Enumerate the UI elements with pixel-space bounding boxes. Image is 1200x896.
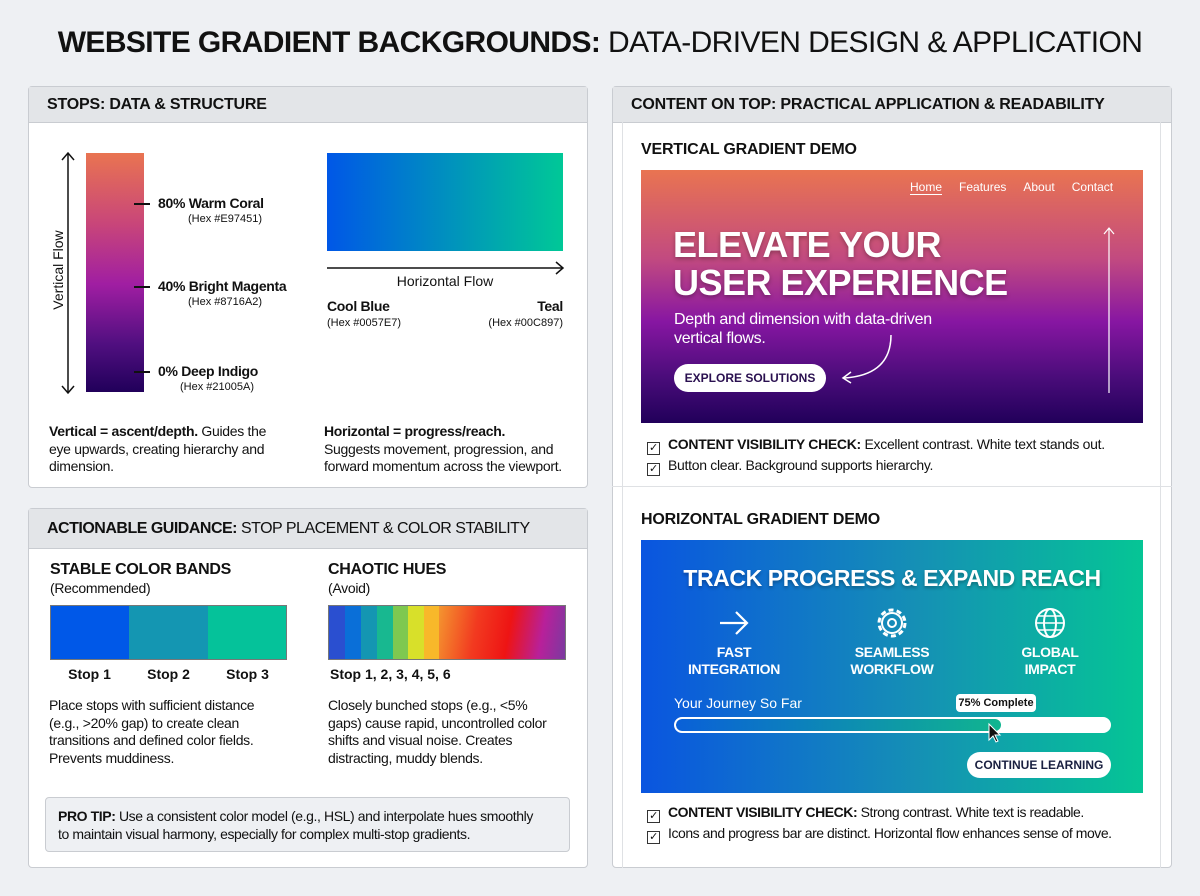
header: content on top [613, 87, 1171, 123]
headline: ELEVATE YOUR [673, 224, 941, 265]
text: chaotic: Closely bunched stops (e.g., <5% [328, 697, 527, 713]
curved arrow [842, 335, 892, 384]
stable bands swatch [50, 605, 287, 660]
title: WEBSITE GRADIENT BACKGROUNDS: DATA-DRIVEN DESIGN & APPLICATION [58, 26, 1142, 59]
label: vertical flow: Vertical Flow [50, 230, 66, 310]
heading: horizontal demo: HORIZONTAL GRADIENT DEMO [641, 511, 880, 528]
nav: About [1023, 180, 1055, 194]
text: chaotic [328, 697, 547, 766]
check: vertical: Button clear. Background supports hierarchy. [668, 457, 933, 473]
heading: vertical demo: VERTICAL GRADIENT DEMO [641, 141, 857, 158]
stop labels vertical: (Hex #8716A2) [188, 296, 262, 308]
feature: fast integration [688, 611, 780, 677]
vertical demo [641, 170, 1143, 423]
progress tooltip [956, 694, 1036, 712]
panel: content on top [612, 86, 1172, 868]
features [688, 608, 1079, 677]
text: horizontal explanation: forward momentum across the viewport. [324, 458, 562, 474]
cursor [988, 722, 1002, 743]
header: guidance: ACTIONABLE GUIDANCE: STOP PLACEMENT & COLOR STABILITY [47, 520, 530, 537]
stop labels vertical [134, 195, 287, 393]
heading: stable color bands [50, 561, 231, 596]
stop labels chaotic: Stop 1, 2, 3, 4, 5, 6 [330, 666, 451, 682]
feature: fast integration: FAST [717, 644, 751, 660]
stop labels vertical: 80% Warm Coral [158, 195, 264, 211]
subtext: Depth and dimension with data-driven [674, 311, 932, 328]
heading: stable color bands: STABLE COLOR BANDS [50, 561, 231, 578]
nav [910, 180, 1113, 195]
check: vertical: CONTENT VISIBILITY CHECK: Excellent contrast. White text stands out. [668, 436, 1105, 452]
feature: fast integration: INTEGRATION [688, 661, 780, 677]
pro tip box: PRO TIP: Use a consistent color model (e.g., HSL) and interpolate hues smoothly [58, 808, 533, 824]
text: horizontal explanation [324, 423, 562, 474]
button: continue learning: CONTINUE LEARNING [975, 758, 1103, 772]
progress tooltip: 75% Complete [958, 697, 1034, 709]
text: chaotic: distracting, muddy blends. [328, 750, 483, 766]
check: horizontal: ✓ [649, 810, 658, 822]
headline: TRACK PROGRESS & EXPAND REACH [683, 565, 1101, 591]
endpoints labels: (Hex #0057E7) [327, 317, 401, 329]
label: horizontal flow: Horizontal Flow [397, 273, 493, 289]
feature: seamless workflow [850, 608, 934, 677]
text: horizontal explanation: Suggests movement, progression, and [324, 440, 553, 456]
text: horizontal explanation: Horizontal = progress/reach. [324, 423, 505, 439]
stop labels vertical: (Hex #E97451) [188, 213, 262, 225]
button [674, 364, 826, 392]
check: horizontal: Icons and progress bar are distinct. Horizontal flow enhances sense of move. [668, 825, 1112, 841]
text: vertical explanation: dimension. [49, 458, 114, 474]
feature: global impact [1021, 608, 1079, 677]
text: vertical explanation: Vertical = ascent/depth. Guides the [49, 423, 266, 439]
text: stable: Prevents muddiness. [49, 750, 174, 766]
heading: chaotic hues [328, 561, 446, 596]
check: horizontal: ✓ [649, 831, 658, 843]
nav: Contact [1072, 180, 1113, 194]
feature: seamless workflow: SEAMLESS [855, 644, 929, 660]
check: horizontal: CONTENT VISIBILITY CHECK: Strong contrast. White text is readable. [668, 804, 1084, 820]
stop labels vertical: 40% Bright Magenta [158, 278, 286, 294]
text: chaotic: gaps) cause rapid, uncontrolled color [328, 714, 546, 730]
endpoints labels: Teal [537, 298, 563, 314]
text: stable: (e.g., >20% gap) to create clean [49, 714, 239, 730]
text: stable: Place stops with sufficient distance [49, 697, 254, 713]
text: stable: transitions and defined color fields. [49, 732, 253, 748]
endpoints labels: (Hex #00C897) [488, 317, 563, 329]
feature: seamless workflow: WORKFLOW [850, 661, 934, 677]
endpoints labels: Cool Blue [327, 298, 390, 314]
check: vertical: ✓ [649, 442, 658, 454]
vertical gradient bar [86, 153, 144, 392]
chaotic swatch [328, 605, 566, 660]
progress bar [674, 717, 1111, 733]
headline [673, 224, 1008, 303]
header: stops: STOPS: DATA & STRUCTURE [47, 96, 267, 113]
horizontal demo [641, 540, 1143, 793]
stop labels: Stop 1 [68, 666, 111, 682]
pro tip box: to maintain visual harmony, especially for complex multi-stop gradients. [58, 826, 470, 842]
feature: global impact: GLOBAL [1021, 644, 1079, 660]
check: vertical: ✓ [649, 463, 658, 475]
stop labels [68, 666, 269, 682]
header: guidance [29, 509, 587, 549]
stop labels: Stop 2 [147, 666, 190, 682]
horizontal gradient rect [327, 153, 563, 251]
text: vertical explanation: eye upwards, creating hierarchy and [49, 440, 264, 456]
guide lines [622, 122, 623, 868]
stop labels vertical: 0% Deep Indigo [158, 363, 258, 379]
nav: Features [959, 180, 1006, 194]
pro tip box [45, 797, 570, 852]
panel: actionable guidance [28, 508, 588, 868]
text: stable [49, 697, 254, 766]
heading: stable color bands: (Recommended) [50, 580, 150, 596]
up arrow [1104, 227, 1114, 393]
subtext: vertical flows. [674, 330, 766, 347]
text: chaotic: shifts and visual noise. Creates [328, 732, 512, 748]
feature: global impact: IMPACT [1025, 661, 1075, 677]
horizontal flow arrow [327, 262, 564, 275]
stop labels: Stop 3 [226, 666, 269, 682]
vertical flow arrow [62, 152, 74, 394]
check: horizontal [647, 804, 1112, 844]
check: vertical [647, 436, 1105, 476]
nav: Home [910, 180, 942, 194]
subtext [674, 311, 932, 347]
headline: USER EXPERIENCE [673, 262, 1008, 303]
header: content on top: CONTENT ON TOP: PRACTICAL APPLICATION & READABILITY [631, 96, 1105, 113]
button: EXPLORE SOLUTIONS [685, 371, 815, 385]
heading: chaotic hues: CHAOTIC HUES [328, 561, 446, 578]
panel: stops data & structure [28, 86, 588, 488]
stop labels vertical: (Hex #21005A) [180, 381, 254, 393]
header: stops [29, 87, 587, 123]
endpoints labels [327, 298, 563, 329]
text: vertical explanation [49, 423, 266, 474]
heading: chaotic hues: (Avoid) [328, 580, 370, 596]
button: continue learning [967, 752, 1111, 778]
progress label: Your Journey So Far [674, 695, 802, 711]
